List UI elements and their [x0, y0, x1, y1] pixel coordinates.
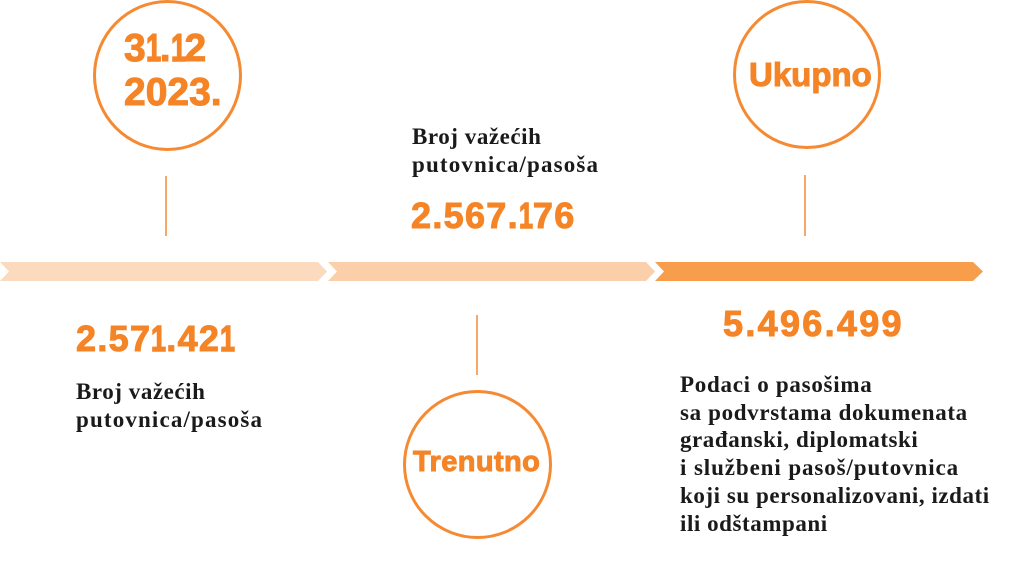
left value: 2.57 .42 — [76, 318, 220, 359]
date text: 1 — [171, 27, 186, 70]
middle description: Broj važećih — [412, 124, 541, 149]
connector middle — [476, 315, 478, 375]
date circle — [93, 0, 242, 151]
total text: Ukupno — [749, 56, 872, 93]
left description: Broj važećih — [76, 379, 205, 404]
timeline arrows — [0, 262, 983, 281]
middle value: 1 — [519, 195, 534, 236]
left value: 1 — [220, 318, 236, 359]
right description: sa podvrstama dokumenata — [680, 400, 968, 425]
middle description: putovnica/pasoša — [412, 152, 599, 177]
right value: 5.496.499 — [723, 303, 904, 344]
left value: 1 — [151, 318, 167, 359]
middle description — [412, 124, 599, 177]
right description: Podaci o pasošima — [680, 372, 872, 397]
current text: Trenutno — [413, 446, 540, 478]
right description: građanski, diplomatski — [680, 427, 918, 452]
date text: 3 . 2 — [124, 27, 206, 70]
right description: koji su personalizovani, izdati — [680, 483, 990, 508]
date text: 1 — [146, 27, 161, 70]
left description: putovnica/pasoša — [76, 407, 263, 432]
total circle — [733, 0, 881, 149]
date text — [124, 27, 222, 114]
current circle — [403, 390, 552, 539]
right description: i službeni pasoš/putovnica — [680, 455, 959, 480]
right description — [680, 372, 990, 536]
left description — [76, 379, 263, 432]
middle value: 2.567. 76 — [411, 195, 576, 236]
connector right — [804, 175, 806, 236]
right description: ili odštampani — [680, 511, 828, 536]
date text: 2023. — [124, 71, 222, 114]
connector left — [165, 176, 167, 236]
